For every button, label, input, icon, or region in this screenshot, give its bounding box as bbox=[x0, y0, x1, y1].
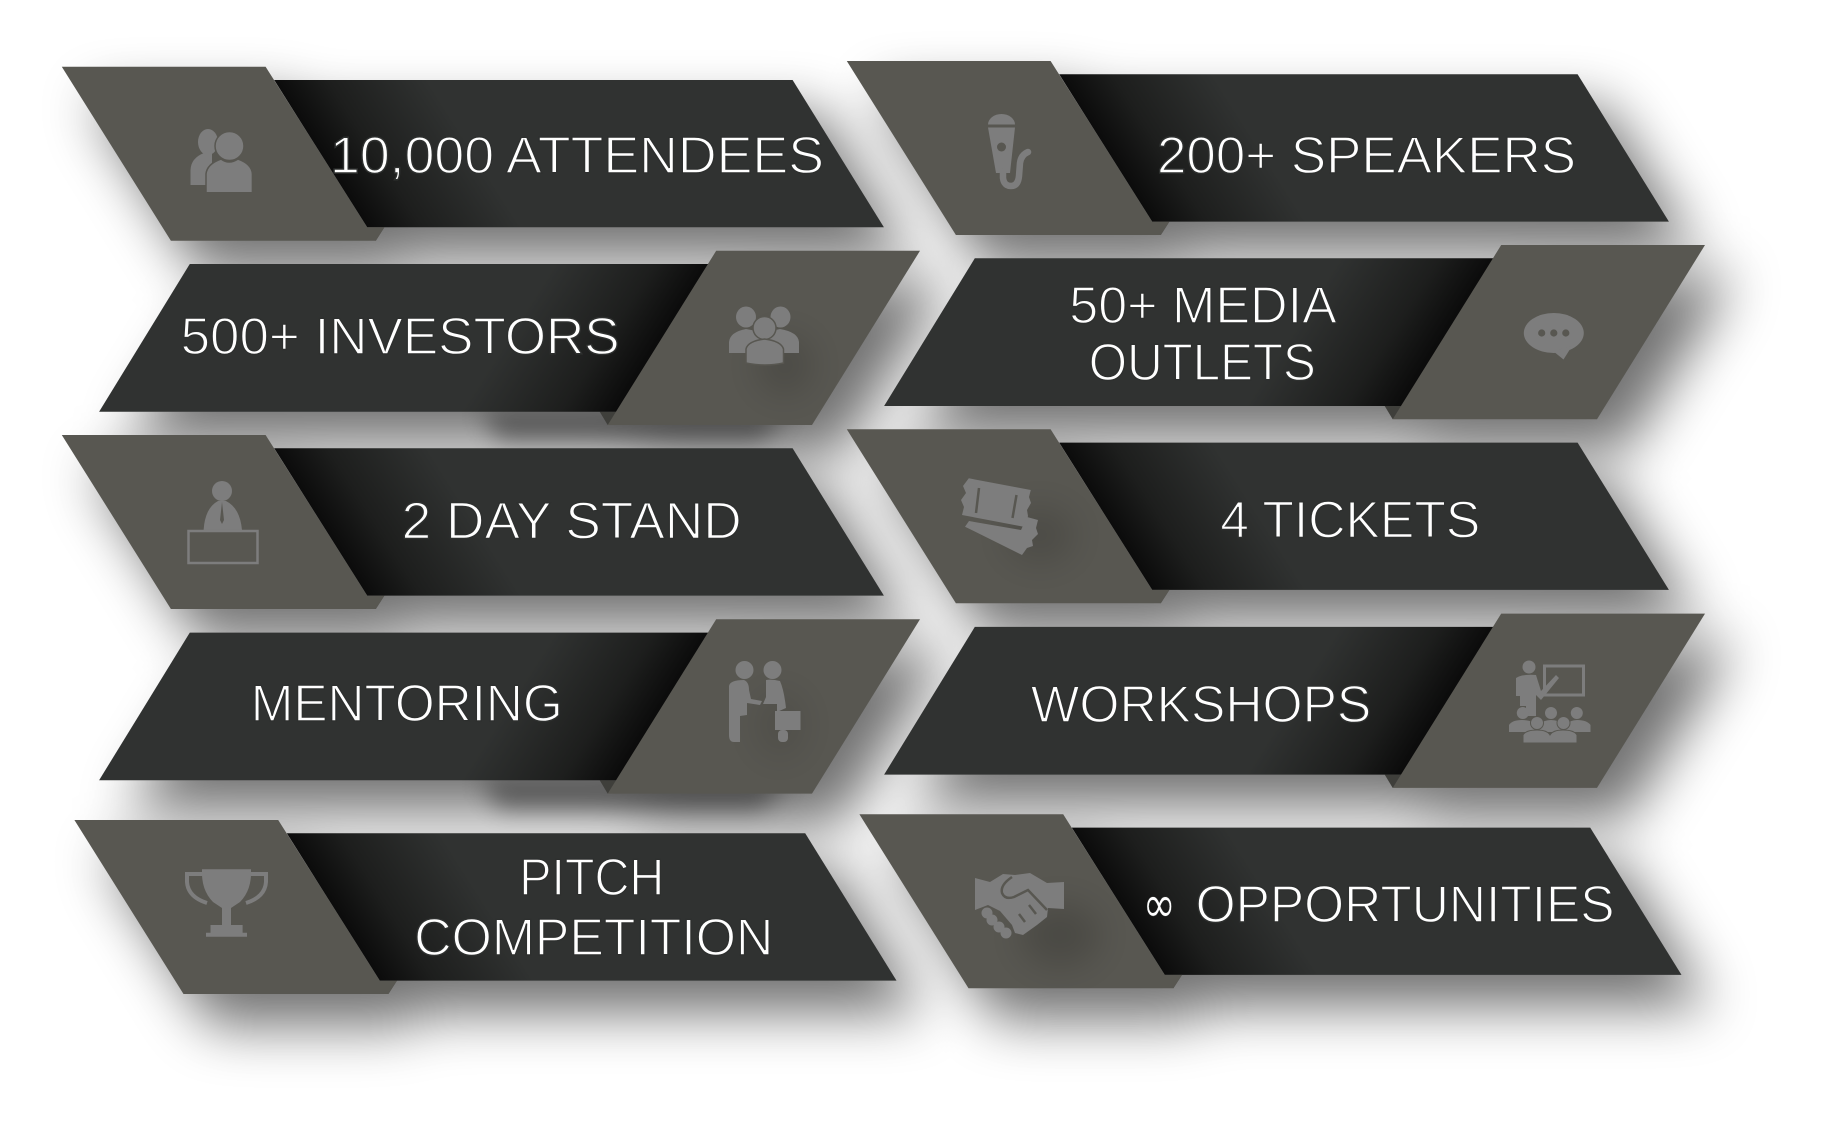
card: 50+ media outlets bbox=[884, 245, 1705, 419]
icon: handshake mentors bbox=[729, 661, 800, 742]
label: opportunities: OPPORTUNITIES bbox=[1196, 876, 1615, 934]
card: 2 day stand bbox=[62, 435, 884, 609]
panel shading bbox=[1020, 903, 1100, 967]
label: workshops: WORKSHOPS bbox=[1031, 676, 1371, 734]
panel shading bbox=[754, 691, 806, 759]
icon: attendees bbox=[190, 129, 252, 193]
shadows behind the cards bbox=[90, 93, 1733, 1026]
card: mentoring bbox=[99, 619, 920, 794]
label: opportunities: ∞ bbox=[1143, 875, 1176, 935]
panel shading bbox=[757, 335, 813, 395]
card: pitch competition bbox=[74, 820, 896, 994]
label: 2 day stand: 2 DAY STAND bbox=[402, 492, 742, 550]
card: workshops bbox=[884, 614, 1705, 788]
icon: handshake bbox=[975, 873, 1064, 938]
icon: trophy bbox=[187, 869, 266, 937]
label: pitch competition: PITCH bbox=[519, 849, 664, 907]
icon: investors bbox=[729, 306, 799, 365]
icon: microphone bbox=[988, 114, 1028, 186]
card: 500+ investors bbox=[99, 251, 920, 425]
icon: workshop bbox=[1509, 660, 1590, 743]
card: 4 tickets bbox=[847, 429, 1669, 603]
panel shading bbox=[1006, 507, 1074, 563]
label: mentoring: MENTORING bbox=[251, 675, 563, 733]
label: 500+ investors: 500+ INVESTORS bbox=[181, 308, 620, 366]
card: 200+ speakers bbox=[847, 61, 1669, 235]
label: 50+ media outlets: 50+ MEDIA bbox=[1069, 277, 1337, 335]
card: opportunities bbox=[859, 814, 1682, 988]
label: pitch competition: COMPETITION bbox=[414, 909, 773, 967]
label: 200+ speakers: 200+ SPEAKERS bbox=[1157, 127, 1576, 185]
icon: speech bubble bbox=[1524, 313, 1584, 360]
label: 50+ media outlets bbox=[1069, 277, 1337, 392]
label: 10,000 attendees: 10,000 ATTENDEES bbox=[330, 127, 824, 185]
label: 4 tickets: 4 TICKETS bbox=[1220, 492, 1480, 550]
icon: presenter at stand bbox=[188, 481, 258, 563]
card: 10,000 attendees bbox=[62, 67, 884, 241]
label: 50+ media outlets: OUTLETS bbox=[1089, 334, 1316, 392]
icon: tickets bbox=[961, 478, 1038, 555]
label: pitch competition bbox=[414, 849, 773, 967]
